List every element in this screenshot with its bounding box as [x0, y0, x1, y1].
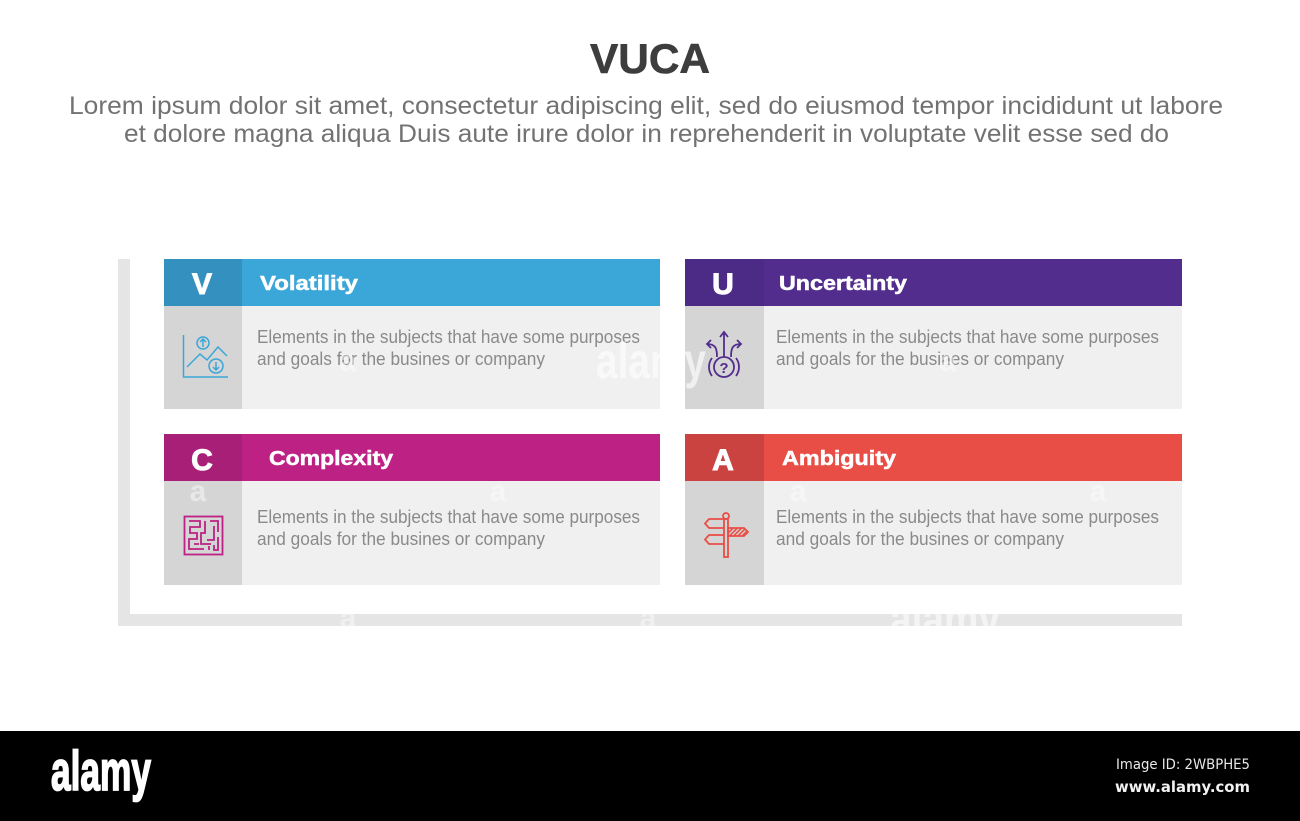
subtitle text block: et dolore magna aliqua Duis aute irure dolor in reprehenderit in voluptate velit esse sed do: [124, 120, 1169, 148]
panel: volatility: Volatility: [260, 273, 359, 295]
panel: volatility: [164, 259, 660, 409]
panel: complexity: C: [191, 444, 213, 477]
watermark overlay: a: [940, 345, 957, 378]
icon: maze: [184, 516, 222, 554]
panel: ambiguity: and goals for the busines or company: [776, 529, 1064, 549]
watermark overlay: [190, 333, 1107, 647]
image id: Image ID: 2WBPHE5: [1116, 757, 1250, 773]
panel: ambiguity: A: [712, 444, 734, 477]
icon: chart with up and down arrows: [184, 335, 228, 377]
panel: volatility: Elements in the subjects that have some purposes: [257, 327, 640, 347]
icon: branching arrows with question mark: [707, 332, 741, 377]
panel: ambiguity: Ambiguity: [782, 448, 897, 470]
subtitle text block: Lorem ipsum dolor sit amet, consectetur adipiscing elit, sed do eiusmod tempor incididunt ut labore: [69, 92, 1223, 120]
panel: complexity: [164, 434, 660, 585]
panel: uncertainty: Uncertainty: [779, 273, 908, 295]
icon: branching arrows with question mark: ?: [719, 360, 729, 377]
footer logo: alamy: [51, 739, 151, 802]
panel: uncertainty: Elements in the subjects that have some purposes: [776, 327, 1159, 347]
watermark overlay: alamy: [890, 591, 1000, 647]
watermark overlay: a: [1090, 475, 1107, 508]
title: VUCA: [590, 35, 710, 82]
website: www.alamy.com: [1115, 778, 1250, 796]
outer L-shaped frame: [118, 259, 1182, 626]
watermark overlay: a: [490, 475, 507, 508]
panel: ambiguity: [685, 434, 1182, 585]
watermark overlay: a: [340, 602, 357, 635]
panel: complexity: Complexity: [269, 448, 394, 470]
watermark overlay: a: [640, 602, 657, 635]
panel: uncertainty: [685, 259, 1182, 409]
icon: signpost: [705, 513, 748, 557]
panel: ambiguity: Elements in the subjects that have some purposes: [776, 507, 1159, 527]
panel: complexity: and goals for the busines or company: [257, 529, 545, 549]
panel: volatility: and goals for the busines or company: [257, 349, 545, 369]
watermark overlay: alamy: [596, 333, 706, 389]
panel: uncertainty: and goals for the busines or company: [776, 349, 1064, 369]
watermark overlay: a: [190, 475, 207, 508]
subtitle text block: [69, 92, 1223, 148]
panel: complexity: Elements in the subjects that have some purposes: [257, 507, 640, 527]
panel: uncertainty: U: [712, 268, 734, 301]
watermark overlay: a: [790, 475, 807, 508]
panel: volatility: V: [192, 268, 212, 301]
footer bar: [0, 731, 1300, 821]
watermark overlay: a: [340, 345, 357, 378]
